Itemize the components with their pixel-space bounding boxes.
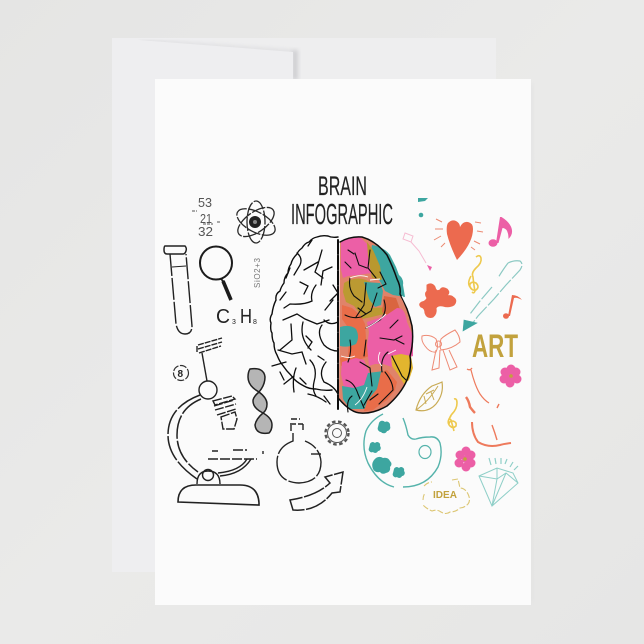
lobe: orange left (340, 305, 369, 366)
icon: orange splat (420, 284, 456, 318)
icon: yellow treble clef (469, 256, 481, 293)
icon: pink pencil doodle (403, 233, 432, 271)
brain: right hemisphere outlines (339, 237, 413, 413)
icon: paintbrush (463, 261, 522, 331)
lobe: teal top right (370, 245, 405, 297)
icon: DNA helix (248, 369, 272, 433)
microscope base (202, 470, 214, 480)
white highlights in brain (341, 276, 408, 405)
icon: bow (422, 330, 460, 370)
icon: curved arrow (290, 472, 343, 510)
numbers: math sum: 53 (198, 195, 212, 210)
brain: left hemisphere (270, 236, 338, 410)
icon: yellow treble clef lower (448, 399, 457, 431)
icon: palette (364, 414, 441, 487)
icon: diamond (479, 458, 518, 506)
icon: pink flower top (500, 364, 522, 388)
palette paint blobs (369, 421, 405, 478)
lobe: teal small (340, 326, 358, 347)
chemical formula: H (240, 306, 252, 328)
icon: violin (466, 368, 511, 446)
coin (174, 366, 188, 380)
icon: idea cloud (423, 479, 470, 514)
icon: atom (233, 201, 279, 243)
icon: pink music note (488, 217, 512, 247)
lobe: ochre lower (391, 354, 413, 384)
microscope stage (208, 450, 263, 459)
numbers: math sum: 21 (200, 211, 212, 226)
icon: pink flower bottom (454, 446, 476, 472)
title (291, 171, 393, 231)
microscope eyepiece (197, 338, 222, 353)
icon: orange music note (503, 295, 522, 319)
microscope arm (168, 395, 200, 479)
icon: teal marks (418, 198, 428, 217)
back card (112, 38, 496, 572)
chemical formula: C (216, 306, 230, 328)
icon: heart (434, 219, 483, 260)
chemical formula (216, 306, 257, 328)
word ART: ART (472, 328, 518, 364)
lobe: ochre top (367, 242, 382, 280)
chemical formula: 8 (253, 319, 257, 326)
icon: idea cloud: IDEA (433, 490, 457, 501)
lobe: pink lower (341, 358, 374, 396)
lobe: orange lower (364, 370, 397, 411)
lobe: teal lower (342, 371, 384, 409)
lobe: teal middle (364, 282, 383, 307)
brain: right hemisphere base fill (339, 237, 413, 413)
numbers: math sum (192, 195, 220, 239)
small vertical formula: SiO2+3 (253, 257, 262, 288)
lobe: pink top (341, 237, 373, 278)
chemical formula: 3 (232, 319, 236, 326)
title: INFOGRAPHIC (291, 199, 393, 231)
icon: gear (326, 422, 348, 444)
numbers: math sum: 32 (198, 224, 213, 239)
brain: right hemisphere colored lobes (340, 237, 413, 411)
icon: flask (277, 419, 321, 483)
icon: microscope (168, 338, 263, 505)
lobe: pink right (367, 308, 413, 368)
coin: 8 (178, 369, 184, 380)
microscope objective (213, 396, 237, 429)
lobe: dark orange middle (382, 296, 401, 320)
front card panel (155, 79, 533, 605)
icon: magnifying glass (200, 246, 232, 300)
icon: test tube (164, 246, 192, 334)
icon: leaf (416, 382, 442, 411)
folded card flap (112, 38, 293, 572)
lobe: ochre middle (343, 279, 392, 319)
title: BRAIN (318, 171, 367, 201)
